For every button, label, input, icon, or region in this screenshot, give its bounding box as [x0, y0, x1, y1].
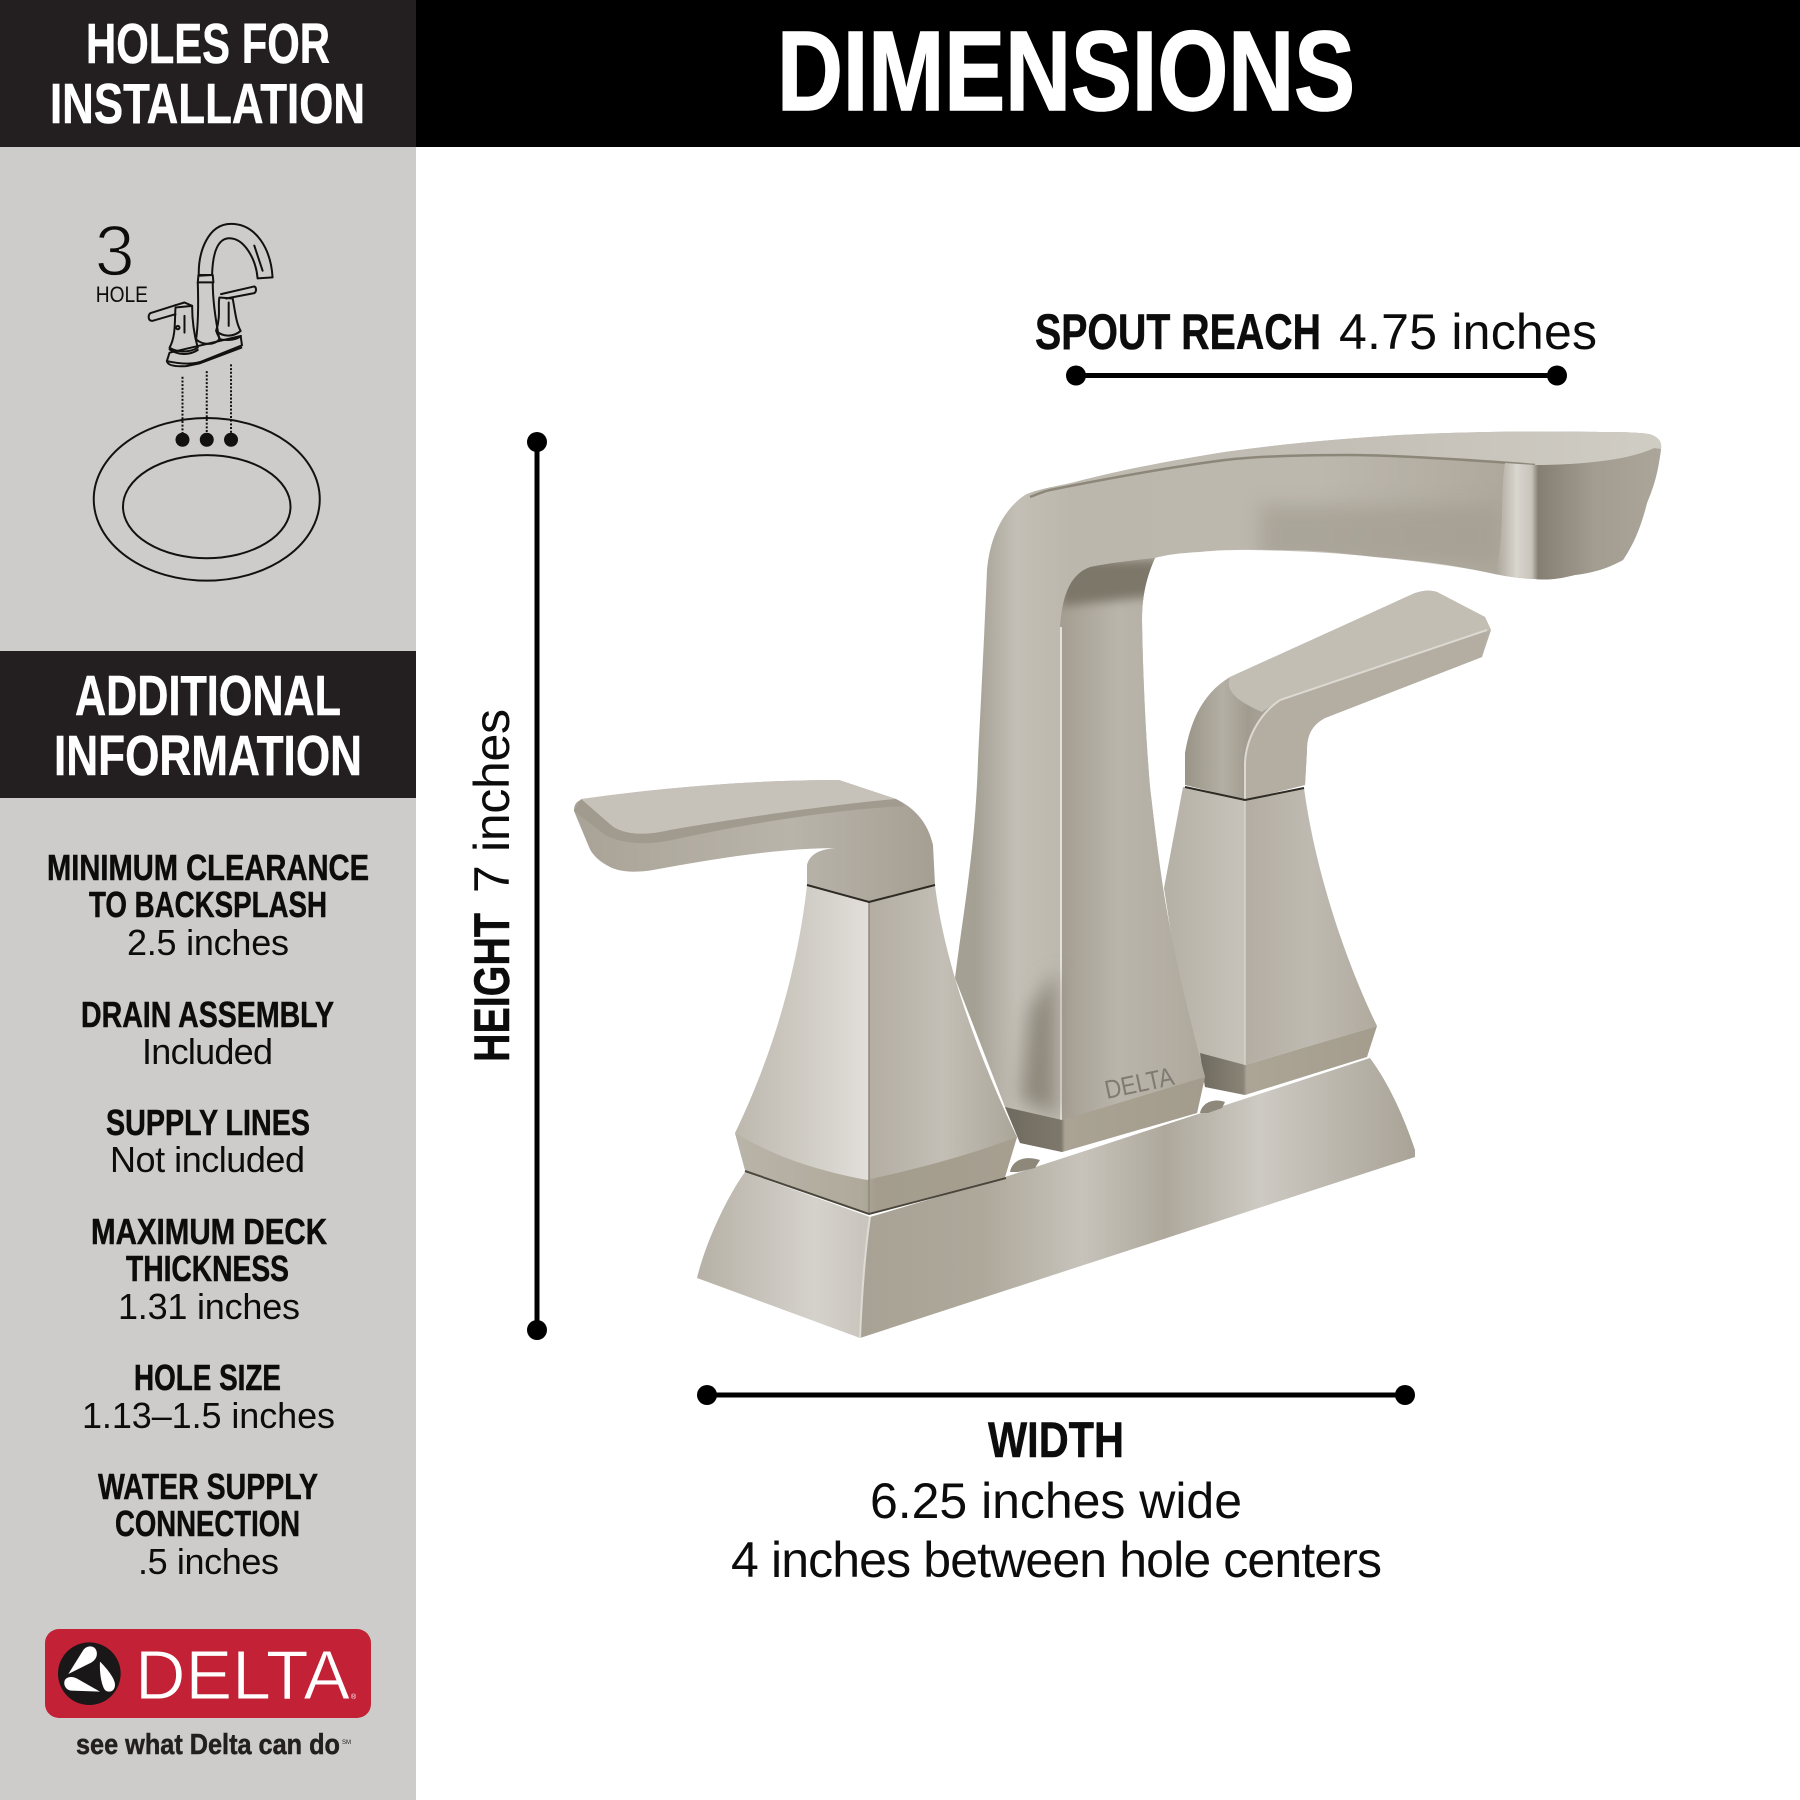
spout underside shading [1260, 505, 1500, 565]
label: spout reach [1035, 304, 1597, 360]
icon: Delta emblem [58, 1642, 121, 1705]
spout [955, 431, 1661, 1152]
title: DIMENSIONS [777, 8, 1355, 134]
spec: minimum clearance [47, 847, 369, 963]
icon: sink basin [94, 418, 320, 581]
right handle body [1164, 787, 1377, 1095]
product: faucet [574, 431, 1661, 1338]
logo: Delta: DELTA [135, 1636, 350, 1714]
spec: supply lines [106, 1102, 310, 1180]
spec: maximum deck thickness: MAXIMUM DECK [91, 1211, 327, 1252]
faucet logo: DELTA [1102, 1061, 1177, 1105]
label: width: 6.25 inches wide [870, 1473, 1242, 1529]
right lever handle [1185, 591, 1491, 800]
spec: maximum deck thickness: 1.31 inches [118, 1286, 300, 1327]
heading: additional information [0, 651, 416, 798]
label: height: HEIGHT [464, 913, 520, 1062]
spec: drain assembly [81, 994, 334, 1072]
spout base ring [1005, 1077, 1205, 1152]
faucet deck plate [697, 1058, 1415, 1338]
spec: maximum deck thickness: THICKNESS [126, 1248, 289, 1289]
left lever handle [574, 780, 935, 902]
label: width: WIDTH [988, 1412, 1124, 1468]
spec: water supply connection [98, 1466, 318, 1582]
heading: holes for installation: INSTALLATION [50, 72, 365, 136]
heading: holes for installation: HOLES FOR [86, 12, 330, 76]
hole count label: HOLE [96, 282, 148, 307]
spec: supply lines: Not included [110, 1139, 305, 1180]
spec: water supply connection: WATER SUPPLY [98, 1466, 318, 1507]
logo: Delta [45, 1629, 371, 1718]
hole count label: 3 [95, 213, 135, 292]
panel: left sidebar [0, 0, 416, 1800]
heading: additional information: INFORMATION [54, 724, 362, 788]
label: spout reach: 4.75 inches [1339, 304, 1597, 360]
tagline: see what Delta can do [76, 1729, 340, 1761]
arrow: height dimension line [527, 432, 547, 1340]
spout top facet [1025, 431, 1661, 495]
heading: holes for installation [0, 0, 416, 147]
spec: hole size [82, 1357, 335, 1436]
label: width: 4 inches between hole centers [731, 1532, 1382, 1588]
arrow: spout reach dimension line [1066, 366, 1567, 386]
label: spout reach: SPOUT REACH [1035, 304, 1321, 360]
label: width [731, 1412, 1382, 1588]
spec: minimum clearance: TO BACKSPLASH [89, 884, 327, 925]
label: height: 7 inches [464, 709, 520, 893]
spout front face [1060, 558, 1205, 1120]
mounting holes [176, 433, 238, 447]
arrow: width dimension line [697, 1385, 1415, 1405]
spec: water supply connection: .5 inches [138, 1541, 279, 1582]
icon: three hole sink diagram [94, 213, 320, 581]
spec: hole size: 1.13–1.5 inches [82, 1395, 335, 1436]
icon: faucet line art [149, 224, 273, 366]
heading: additional information: ADDITIONAL [75, 664, 341, 728]
logo: Delta: ® [351, 1693, 357, 1701]
title banner [416, 0, 1800, 147]
dotted guide lines [182, 364, 231, 435]
spec: drain assembly: DRAIN ASSEMBLY [81, 994, 334, 1035]
left handle body [735, 885, 1017, 1214]
spec: supply lines: SUPPLY LINES [106, 1102, 310, 1143]
spout end face [1495, 448, 1661, 580]
hole count label [95, 213, 148, 307]
spec: maximum deck thickness [91, 1211, 327, 1327]
spec: minimum clearance: MINIMUM CLEARANCE [47, 847, 369, 888]
tagline: SM [342, 1740, 351, 1746]
label: height [464, 709, 520, 1062]
spec: minimum clearance: 2.5 inches [127, 922, 289, 963]
spec: hole size: HOLE SIZE [134, 1357, 281, 1398]
spec: drain assembly: Included [142, 1031, 273, 1072]
spec: water supply connection: CONNECTION [115, 1503, 300, 1544]
